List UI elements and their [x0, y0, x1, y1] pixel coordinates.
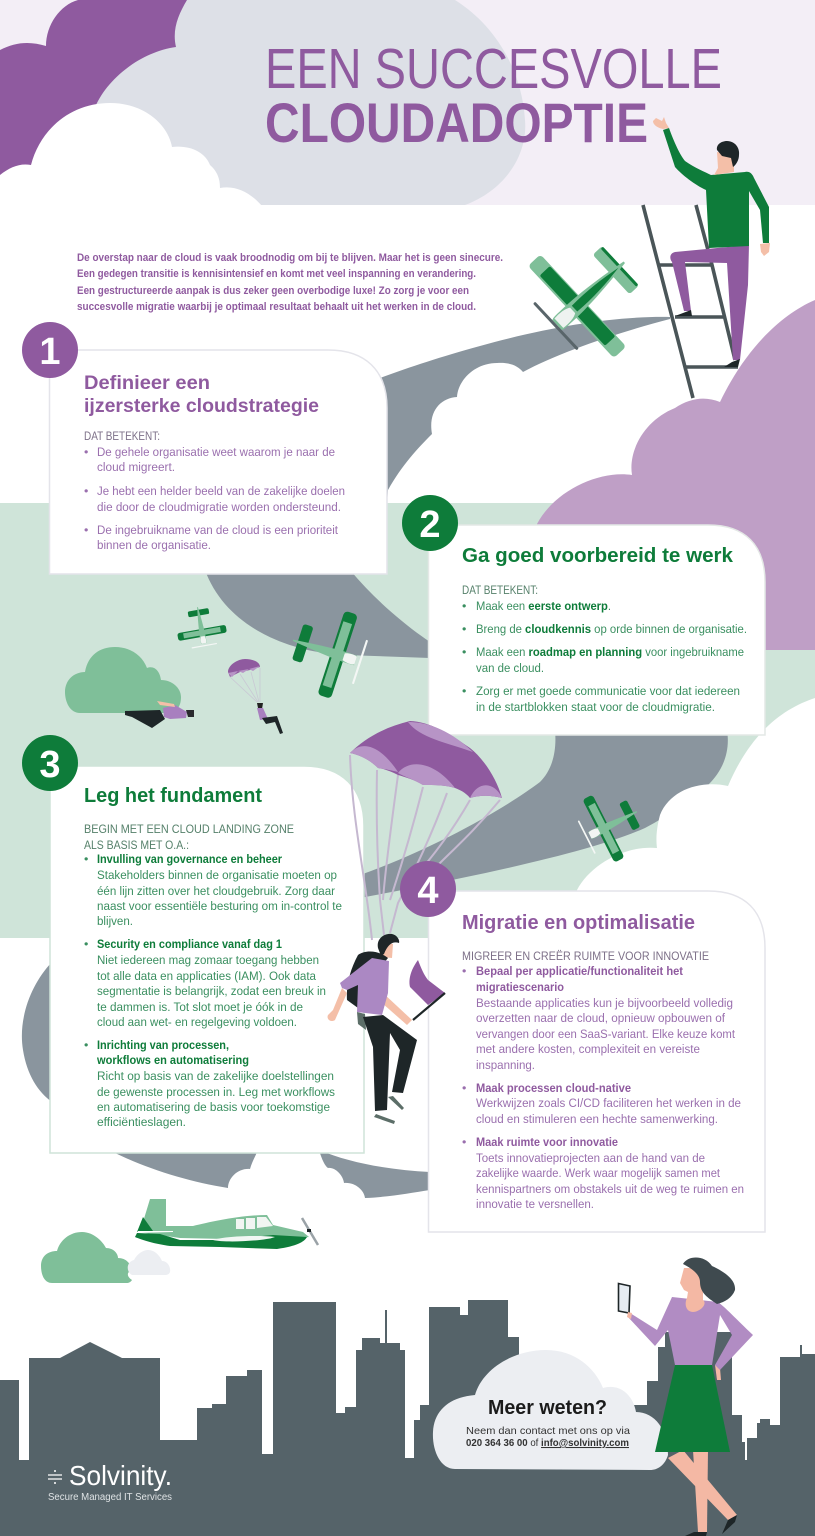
logo: Solvinity: Solvinity.: [69, 1460, 172, 1491]
heading 1: ijzersterke cloudstrategie: [84, 396, 319, 417]
list 1: cloud migreert.: [97, 460, 175, 474]
list 3: cloud aan wet- en regelgeving voldoen.: [97, 1015, 297, 1029]
list 1: •: [84, 445, 88, 459]
list 2: Breng de cloudkennis op orde binnen de organisatie.: [476, 622, 747, 636]
illustration: green cloud: [65, 647, 181, 713]
list 3: naast voor essentiële besturing om in-control te: [97, 899, 342, 913]
list 1: DAT BETEKENT:: [84, 429, 160, 443]
list 3: Invulling van governance en beheer: [97, 852, 282, 866]
list 4: •: [462, 1081, 466, 1095]
intro text: De overstap naar de cloud is vaak broodnodig om bij te blijven. Maar het is geen sinecure.: [77, 252, 503, 264]
illustration: plane small: [173, 603, 229, 651]
intro text: Een gestructureerde aanpak is dus zeker geen overbodige luxe! Zo zorg je voor een: [77, 285, 469, 297]
list 2: in de startblokken staat voor de cloudmigratie.: [476, 700, 715, 714]
heading 1: [84, 373, 319, 417]
contact text: [466, 1397, 630, 1449]
illustration: plane side view: [135, 1199, 318, 1249]
list 1: De ingebruikname van de cloud is een prioriteit: [97, 523, 339, 537]
panel: step 4: [428, 891, 765, 1232]
list 3: segmentatie is belangrijk, zodat een breuk in: [97, 984, 326, 998]
heading 2: Ga goed voorbereid te werk: [462, 544, 734, 567]
list 1: [84, 429, 345, 552]
panel: step 2: [402, 495, 765, 735]
list 4: cloud en stimuleren een hechte samenwerking.: [476, 1112, 718, 1126]
list 3: BEGIN MET EEN CLOUD LANDING ZONE: [84, 822, 294, 836]
panel: step 3: [22, 735, 364, 1153]
logo: Solvinity: [48, 1460, 172, 1503]
list 2: •: [462, 622, 466, 636]
cloud: top purple: [0, 0, 187, 190]
list 4: met andere kosten, complexiteit en vereiste: [476, 1042, 700, 1056]
intro text: [77, 252, 503, 313]
illustration: plane right: [570, 780, 653, 869]
badge 2: [402, 495, 458, 551]
list 3: Security en compliance vanaf dag 1: [97, 937, 282, 951]
list 3: [84, 822, 342, 1129]
list 4: vervangen door een SaaS-variant. Elke keuze komt: [476, 1027, 735, 1041]
list 2: •: [462, 599, 466, 613]
illustration: plane top: [512, 216, 667, 373]
badge 4: [400, 861, 456, 917]
swoosh: left grey arc: [22, 962, 52, 1102]
illustration: woman with tablet: [618, 1257, 753, 1536]
heading 1: Definieer een: [84, 373, 210, 394]
list 3: één lijn zitten over het cloudgebruik. Zorg daar: [97, 884, 335, 898]
swoosh: upper grey ribbon: [380, 317, 670, 505]
swoosh: middle grey ribbon: [205, 570, 430, 658]
list 1: Je hebt een helder beeld van de zakelijke doelen: [97, 484, 345, 498]
list 4: Maak processen cloud-native: [476, 1081, 631, 1095]
list 2: [462, 583, 747, 714]
list 3: te dammen is. Tot slot moet je óók in de: [97, 1000, 303, 1014]
illustration: big parachute: [350, 721, 502, 940]
list 2: Maak een eerste ontwerp.: [476, 599, 611, 613]
badge 3: 3: [39, 744, 61, 786]
list 4: Bestaande applicaties kun je bijvoorbeeld volledig: [476, 996, 733, 1010]
illustration: man with flag: [328, 934, 445, 1124]
list 3: blijven.: [97, 914, 133, 928]
list 3: Niet iedereen mag zomaar toegang hebben: [97, 953, 319, 967]
list 1: binnen de organisatie.: [97, 538, 211, 552]
contact text: 020 364 36 00 of info@solvinity.com: [466, 1437, 629, 1449]
list 2: DAT BETEKENT:: [462, 583, 538, 597]
title: [265, 37, 722, 154]
illustration: skydiver horizontal: [125, 701, 194, 728]
list 1: die door de cloudmigratie worden ondersteund.: [97, 500, 341, 514]
list 3: en automatisering de basis voor toekomstige: [97, 1100, 330, 1114]
list 4: •: [462, 1135, 466, 1149]
list 3: •: [84, 937, 88, 951]
list 1: De gehele organisatie weet waarom je naar de: [97, 445, 335, 459]
list 3: Inrichting van processen,: [97, 1038, 229, 1052]
badge 2: 2: [419, 504, 441, 546]
cloud: top white: [0, 103, 262, 206]
list 2: Maak een roadmap en planning voor ingebruikname: [476, 645, 744, 659]
title: CLOUDADOPTIE: [265, 91, 648, 154]
contact text: Meer weten?: [488, 1397, 607, 1419]
swoosh: lower grey ribbon: [360, 730, 728, 898]
illustration: man on ladder: [643, 117, 770, 398]
list 2: •: [462, 645, 466, 659]
illustration: small parachute: [228, 659, 283, 734]
list 4: Werkwijzen zoals CI/CD faciliteren het werken in de: [476, 1096, 741, 1110]
list 3: •: [84, 852, 88, 866]
list 3: tot alle data en applicaties (IAM). Ook data: [97, 969, 316, 983]
list 4: MIGREER EN CREËR RUIMTE VOOR INNOVATIE: [462, 949, 709, 963]
badge 1: 1: [39, 331, 61, 373]
illustration: green cloud bottom: [41, 1232, 132, 1283]
illustration: small grey cloud: [128, 1250, 170, 1275]
list 2: Zorg er met goede communicatie voor dat iedereen: [476, 684, 740, 698]
badge 3: [22, 735, 78, 791]
list 3: •: [84, 1038, 88, 1052]
list 2: •: [462, 684, 466, 698]
list 4: Bepaal per applicatie/functionaliteit het: [476, 964, 683, 978]
panel: step 1: [22, 322, 387, 574]
cloud: top grey: [92, 0, 525, 205]
list 2: van de cloud.: [476, 661, 544, 675]
list 4: inspanning.: [476, 1058, 535, 1072]
list 3: Richt op basis van de zakelijke doelstellingen: [97, 1069, 334, 1083]
cloud: white right: [577, 698, 815, 938]
list 1: •: [84, 523, 88, 537]
list 3: efficiëntieslagen.: [97, 1115, 186, 1129]
list 4: zakelijke waarde. Werk waar mogelijk samen met: [476, 1166, 720, 1180]
badge 1: [22, 322, 78, 378]
list 3: de gewenste processen in. Leg met workflows: [97, 1085, 335, 1099]
list 4: Maak ruimte voor innovatie: [476, 1135, 618, 1149]
illustration: plane middle: [279, 598, 375, 704]
list 4: kennispartners om obstakels uit de weg te ruimen en: [476, 1182, 744, 1196]
contact text: Neem dan contact met ons op via: [466, 1425, 630, 1437]
cloud: lilac right: [537, 300, 815, 650]
list 4: migratiescenario: [476, 980, 564, 994]
swoosh: bottom grey: [112, 1150, 430, 1198]
list 3: ALS BASIS MET O.A.:: [84, 838, 189, 852]
skyline: [0, 1300, 815, 1536]
title: EEN SUCCESVOLLE: [265, 37, 722, 101]
intro text: Een gedegen transitie is kennisintensief en komt met veel inspanning en verandering.: [77, 268, 476, 280]
list 4: innovatie te versnellen.: [476, 1197, 594, 1211]
logo: Solvinity: Secure Managed IT Services: [48, 1492, 172, 1503]
cloud: contact: [433, 1350, 668, 1470]
heading 3: Leg het fundament: [84, 784, 262, 807]
heading 4: Migratie en optimalisatie: [462, 911, 695, 934]
list 4: Toets innovatieprojecten aan de hand van de: [476, 1151, 705, 1165]
list 3: Stakeholders binnen de organisatie moeten op: [97, 868, 337, 882]
list 1: •: [84, 484, 88, 498]
badge 4: 4: [417, 870, 439, 912]
intro text: succesvolle migratie waarbij je optimaal resultaat behaalt uit het werken in de cloud.: [77, 301, 476, 313]
list 4: overzetten naar de cloud, opnieuw opbouwen of: [476, 1011, 726, 1025]
list 3: workflows en automatisering: [96, 1053, 249, 1067]
list 4: [462, 949, 744, 1211]
list 4: •: [462, 964, 466, 978]
